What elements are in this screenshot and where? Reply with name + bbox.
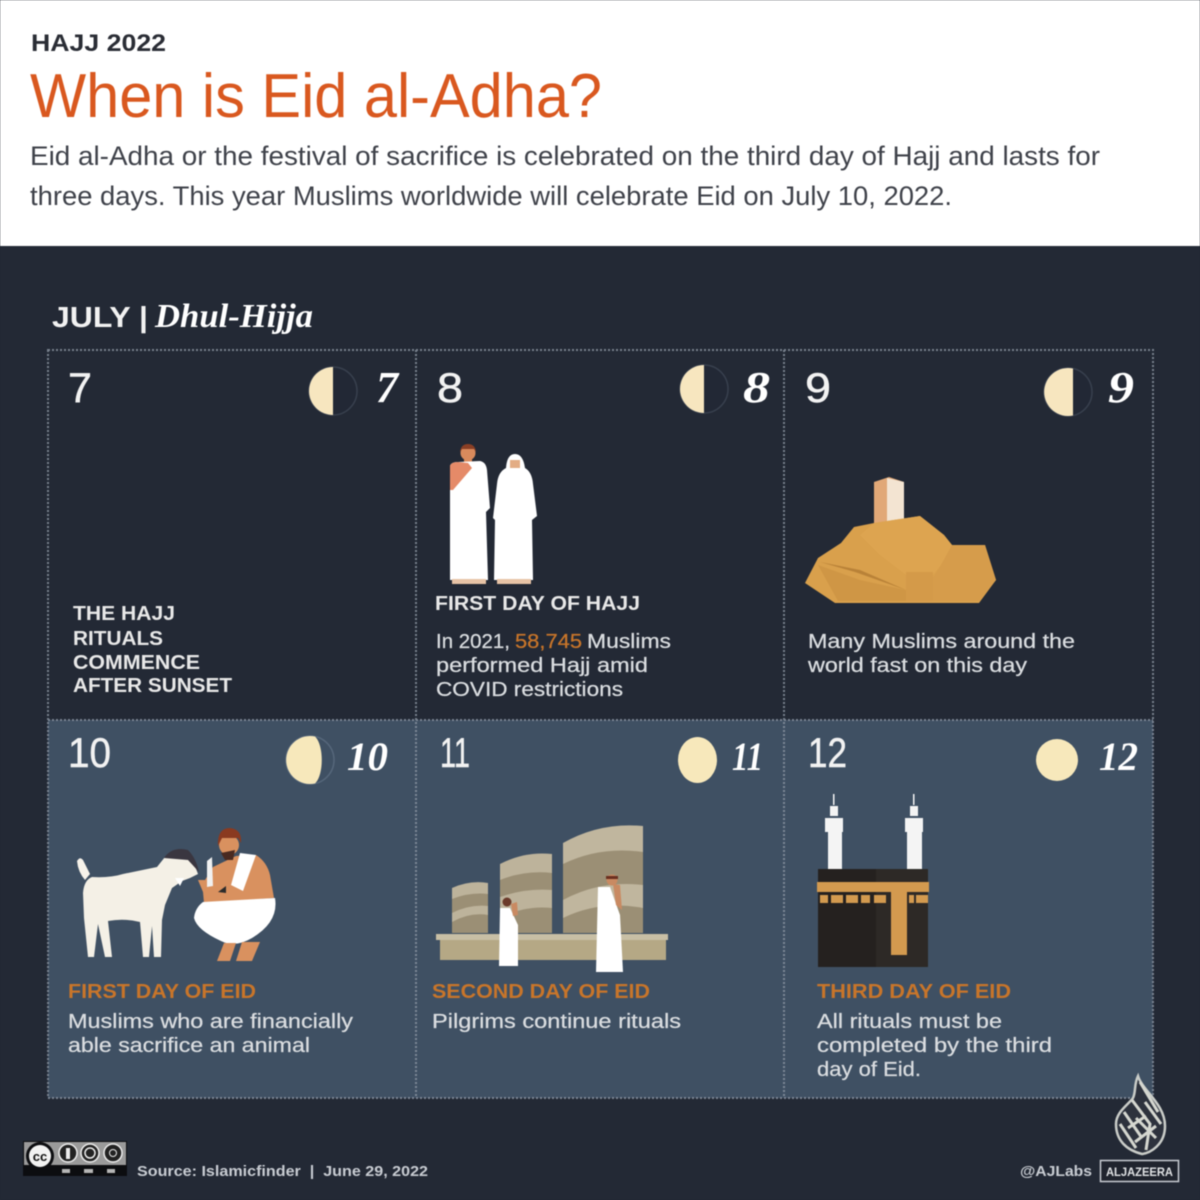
footer: license badge [23, 1141, 127, 1176]
heading: third day of Eid: THIRD DAY OF EID [817, 981, 1011, 1003]
icon: moon phase 7 [309, 367, 357, 415]
text: 2021 statistic: COVID restrictions [436, 679, 623, 701]
kicker: HAJJ 2022 [31, 30, 166, 57]
intro text: Eid al-Adha or the festival of sacrifice is celebrated on the third day of Hajj and lasts for [30, 141, 1100, 171]
panel: day 7 [68, 363, 400, 697]
heading: first day of Hajj: FIRST DAY OF HAJJ [435, 593, 640, 615]
date number 7: 7 [68, 364, 92, 411]
icon: moon phase 9 [1044, 368, 1092, 416]
date number 9: 9 [805, 364, 831, 411]
text: 2021 statistic: 58,745 [515, 631, 582, 653]
text: 2021 statistic [436, 631, 671, 701]
illustration: Mount Arafat [805, 477, 996, 603]
title: When is Eid al-Adha? [30, 62, 602, 131]
header panel [0, 0, 1200, 246]
panel: day 10 [68, 729, 388, 1057]
Hijri date 9: 9 [1108, 363, 1134, 412]
Hijri date 12: 12 [1099, 734, 1138, 779]
Hijri date 10: 10 [347, 734, 388, 779]
text: rituals commence: COMMENCE [73, 652, 200, 674]
text: rituals completed: completed by the third [817, 1035, 1052, 1057]
date number 8: 8 [437, 364, 463, 411]
text: rituals completed: day of Eid. [817, 1059, 921, 1081]
icon: moon phase 11 [678, 737, 717, 783]
calendar heading [52, 298, 313, 335]
panel: day 8 [435, 363, 770, 701]
calendar heading: JULY | [52, 302, 148, 334]
panel: day 11 [432, 729, 763, 1033]
panel: day 12 [808, 729, 1138, 1081]
text: rituals completed: All rituals must be [817, 1011, 1002, 1033]
heading: second day of Eid: SECOND DAY OF EID [432, 981, 650, 1003]
dark calendar background [0, 246, 1200, 1200]
footer: license badge: cc [33, 1149, 47, 1164]
text: 2021 statistic: performed Hajj amid [436, 655, 648, 677]
date number 10: 10 [68, 729, 111, 776]
footer: Al Jazeera logo [1116, 1076, 1165, 1154]
panel: day 9 [805, 363, 1134, 677]
text: rituals commence: THE HAJJ [73, 603, 175, 625]
illustration: two pilgrims [450, 444, 537, 584]
footer: Al Jazeera wordmark: ALJAZEERA [1106, 1165, 1173, 1179]
illustration: man with goat [77, 828, 276, 961]
icon: moon phase 12 [1036, 739, 1078, 781]
illustration: Kaaba and minarets [817, 794, 929, 967]
calendar heading: Dhul-Hijja [154, 298, 313, 335]
text: fasting: Many Muslims around the [808, 631, 1075, 653]
text: pilgrims continue: Pilgrims continue rituals [432, 1011, 681, 1033]
Hijri date 8: 8 [743, 363, 770, 412]
text: fasting: world fast on this day [807, 655, 1027, 677]
text: rituals commence [73, 603, 232, 697]
text: sacrifice: able sacrifice an animal [68, 1035, 310, 1057]
illustration: Jamarat pillars and pilgrims [436, 825, 668, 972]
text: rituals completed [817, 1011, 1052, 1081]
text: 2021 statistic: Muslims [587, 631, 671, 653]
text: rituals commence: RITUALS [73, 628, 163, 650]
intro text [30, 141, 1100, 211]
lower row fill [48, 720, 1153, 1098]
intro text: three days. This year Muslims worldwide will celebrate Eid on July 10, 2022. [30, 181, 952, 211]
footer: AJLabs handle: @AJLabs [1020, 1163, 1092, 1180]
icon: moon phase 10 [286, 736, 334, 784]
heading: first day of Eid: FIRST DAY OF EID [68, 981, 256, 1003]
text: sacrifice [68, 1011, 353, 1057]
text: rituals commence: AFTER SUNSET [73, 675, 232, 697]
text: sacrifice: Muslims who are financially [68, 1011, 353, 1033]
icon: moon phase 8 [680, 365, 728, 413]
text: fasting [807, 631, 1075, 677]
footer: source: Source: Islamicfinder | June 29, 2022 [137, 1163, 428, 1180]
date number 11: 11 [440, 729, 470, 776]
date number 12: 12 [808, 729, 847, 776]
footer: Al Jazeera wordmark [1100, 1160, 1178, 1182]
Hijri date 11: 11 [732, 734, 763, 779]
text: 2021 statistic: In 2021, [436, 631, 510, 653]
Hijri date 7: 7 [376, 363, 400, 412]
